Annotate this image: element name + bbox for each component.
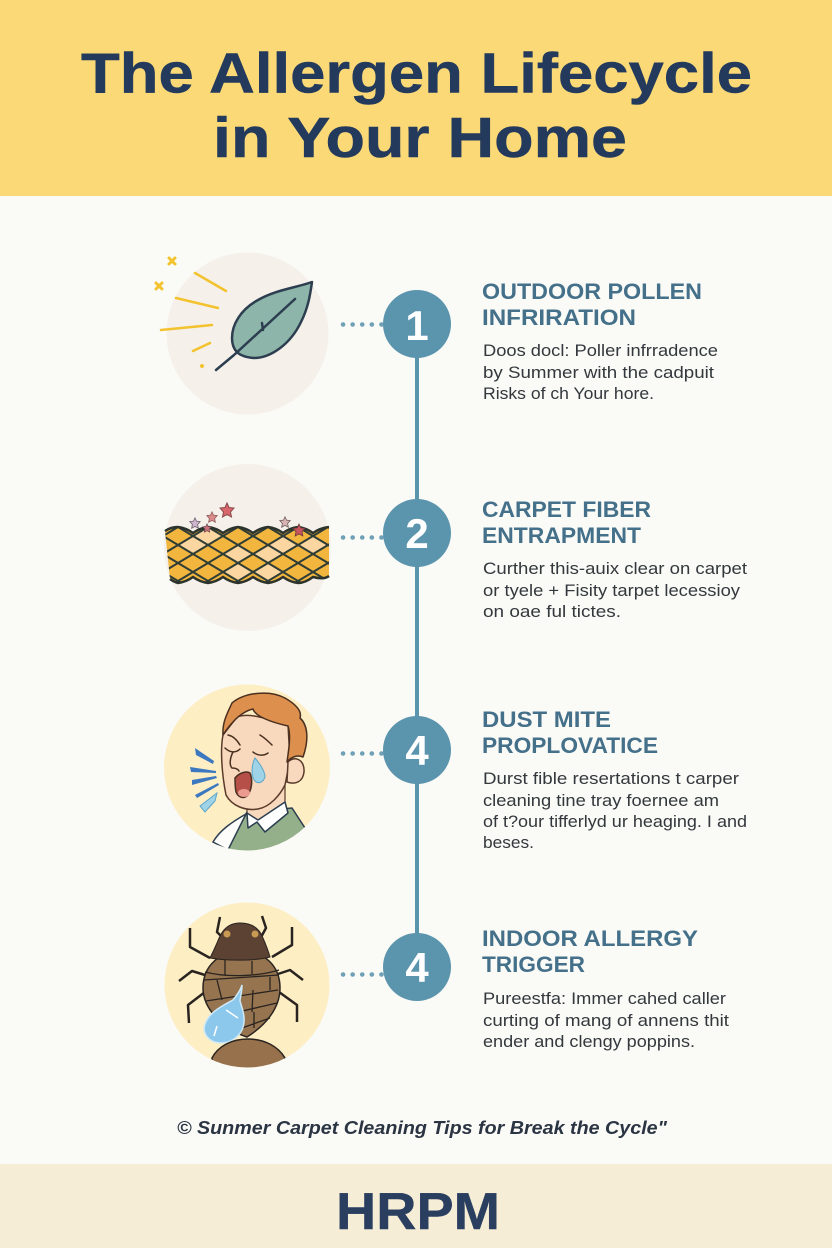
text: step 4: Pureestfa: Immer cahed caller [483,990,727,1008]
text: step 1: OUTDOOR POLLEN [482,279,702,304]
icon: dust mite with droplet [164,902,330,1075]
number badge 4: 4 [405,944,429,991]
text: step 3: cleaning tine tray foernee am [483,792,719,810]
text: step 4 [482,926,730,1051]
text: step 2: Curther this-auix clear on carpet [483,560,748,578]
text: step 2: or tyele + Fisity tarpet lecessioy [483,582,741,600]
text: step 2: CARPET FIBER [482,497,651,522]
title: in Your Home [213,106,627,170]
connector dots [343,322,384,327]
connector dots [343,751,384,756]
text: step 2: on oae ful tictes. [483,603,621,621]
text: step 3: Durst fible resertations t carper [483,770,740,788]
text: step 1: Doos docl: Poller infrradence [483,342,718,360]
text: step 3: beses. [483,834,534,852]
icon: carpet fibers with allergens [164,464,331,631]
icon: leaf with pollen [156,252,328,414]
step 2 [164,464,747,631]
number badge 1: 1 [405,302,429,349]
number badge 1 [383,290,451,358]
text: step 3: DUST MITE [482,707,611,732]
text: step 1: by Summer with the cadpuit [483,364,715,382]
text: step 3: PROPLOVATICE [482,733,658,758]
number badge 2: 2 [405,510,429,557]
text: step 3: of t?our tifferlyd ur heaging. I and [483,813,747,831]
title banner [0,0,832,196]
text: step 1: INFRIRATION [482,305,636,330]
number badge 2 [383,499,451,567]
text: step 3 [482,707,747,852]
brand name: HRPM [336,1182,500,1240]
footer note: © Sunmer Carpet Cleaning Tips for Break the Cycle" [177,1117,667,1138]
title [81,42,752,170]
connector dots [343,972,384,977]
connector dots [343,535,384,540]
text: step 4: INDOOR ALLERGY [482,926,698,951]
icon: sneezing person [164,684,330,860]
number badge 4 [383,933,451,1001]
text: step 4: TRIGGER [482,952,585,977]
text: step 2 [482,497,748,621]
step 3 [164,684,747,860]
text: step 1 [482,279,718,403]
text: step 4: ender and clengy poppins. [483,1033,695,1051]
title: The Allergen Lifecycle [81,42,752,106]
step 4 [164,902,730,1075]
text: step 2: ENTRAPMENT [482,523,642,548]
footer band [0,1164,832,1248]
text: step 4: curting of mang of annens thit [483,1012,730,1030]
text: step 1: Risks of ch Your hore. [483,385,654,403]
step 1 [156,252,718,414]
number badge 3 [383,716,451,784]
timeline line [415,340,419,960]
number badge 3: 4 [405,727,429,774]
